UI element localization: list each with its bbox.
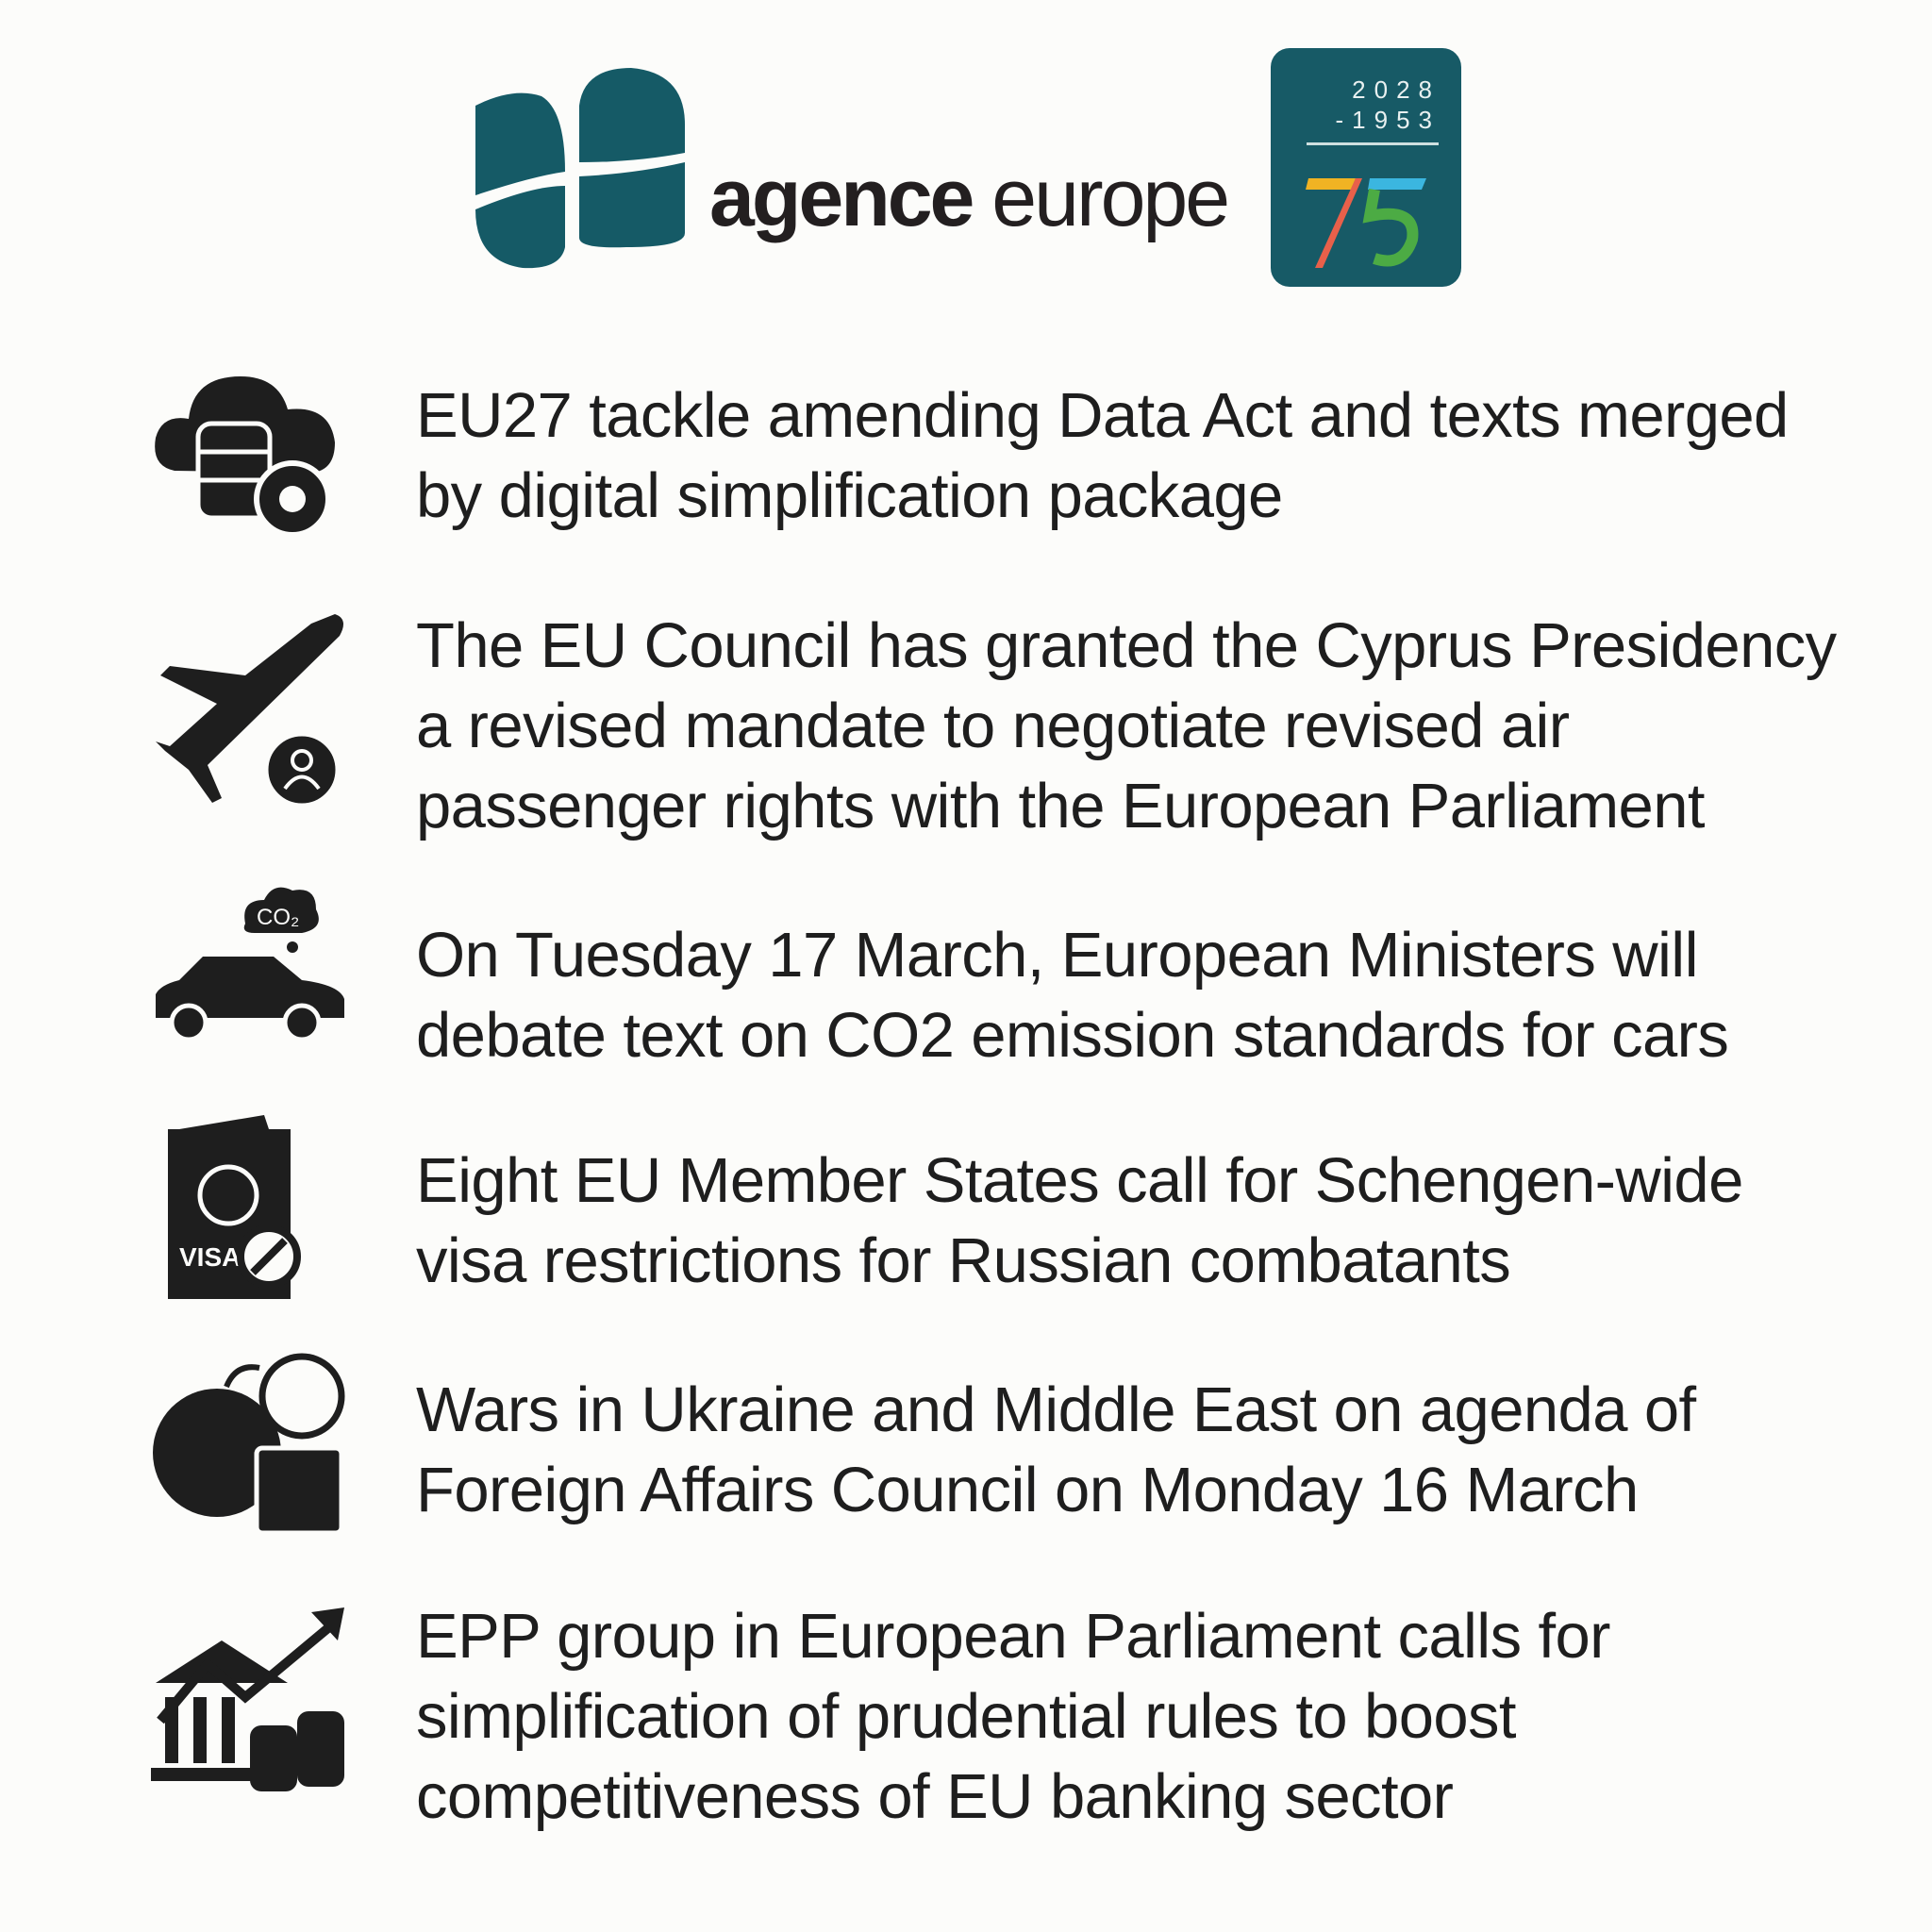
- text 1: [416, 380, 1789, 531]
- text 2: a revised mandate to negotiate revised air: [416, 691, 1569, 761]
- text 6: [416, 1601, 1610, 1832]
- text 2: The EU Council has granted the Cyprus Presidency: [416, 610, 1837, 681]
- logo mark: [475, 68, 685, 268]
- logo text: agence europe: [709, 153, 1227, 243]
- icon: bank growth coins: [151, 1607, 344, 1791]
- anniversary badge: [1271, 48, 1461, 287]
- text 4: Eight EU Member States call for Schengen-wide: [416, 1145, 1743, 1216]
- icon: plane passenger: [156, 614, 343, 804]
- text 3: On Tuesday 17 March, European Ministers will: [416, 920, 1698, 991]
- text 5: Wars in Ukraine and Middle East on agenda of: [416, 1374, 1696, 1445]
- anniversary badge: 2028: [1352, 75, 1441, 104]
- text 1: by digital simplification package: [416, 460, 1283, 531]
- text 2: [416, 610, 1837, 841]
- icon: car CO2: CO₂: [257, 905, 299, 930]
- anniversary badge: -1953: [1336, 106, 1441, 134]
- text 5: [416, 1374, 1696, 1525]
- icon: car CO2: [156, 887, 344, 1038]
- icon: visa passport: [168, 1115, 301, 1299]
- text 6: simplification of prudential rules to boost: [416, 1681, 1516, 1752]
- text 6: competitiveness of EU banking sector: [416, 1761, 1453, 1832]
- text 4: visa restrictions for Russian combatants: [416, 1225, 1510, 1296]
- text 3: [416, 920, 1728, 1071]
- text 4: [416, 1145, 1743, 1296]
- text 3: debate text on CO2 emission standards for cars: [416, 1000, 1728, 1071]
- icon: visa passport: VISA: [179, 1242, 241, 1272]
- text 1: EU27 tackle amending Data Act and texts merged: [416, 380, 1789, 451]
- text 6: EPP group in European Parliament calls for: [416, 1601, 1610, 1672]
- icon: globe calendar: [153, 1353, 345, 1530]
- icon: cloud database gear: [155, 376, 335, 532]
- text 2: passenger rights with the European Parliament: [416, 771, 1705, 841]
- text 5: Foreign Affairs Council on Monday 16 March: [416, 1455, 1639, 1525]
